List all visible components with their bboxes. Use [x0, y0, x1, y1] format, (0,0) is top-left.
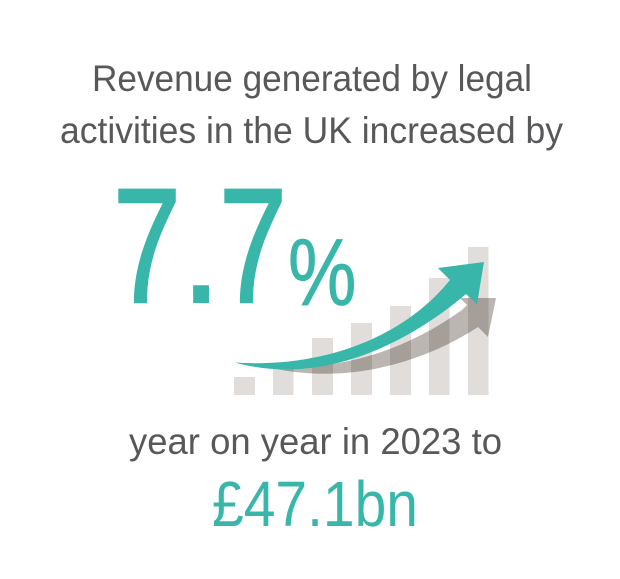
- big figure: 7.7%: 7: [113, 155, 181, 337]
- heading: Revenue generated by legal: [92, 58, 532, 99]
- big figure: 7.7%: [113, 154, 356, 339]
- heading: [60, 58, 563, 151]
- revenue figure: £47.1bn: [212, 468, 418, 540]
- arrow: grey shadow: [263, 298, 496, 374]
- heading: activities in the UK increased by: [60, 110, 563, 151]
- big figure: 7.7%: %: [288, 220, 356, 326]
- big figure: 7.7%: 7: [219, 155, 287, 337]
- big figure: 7.7%: .: [178, 154, 224, 339]
- caption: year on year in 2023 to: [129, 421, 502, 462]
- arrow: teal: [235, 262, 484, 369]
- bar chart: [234, 247, 488, 395]
